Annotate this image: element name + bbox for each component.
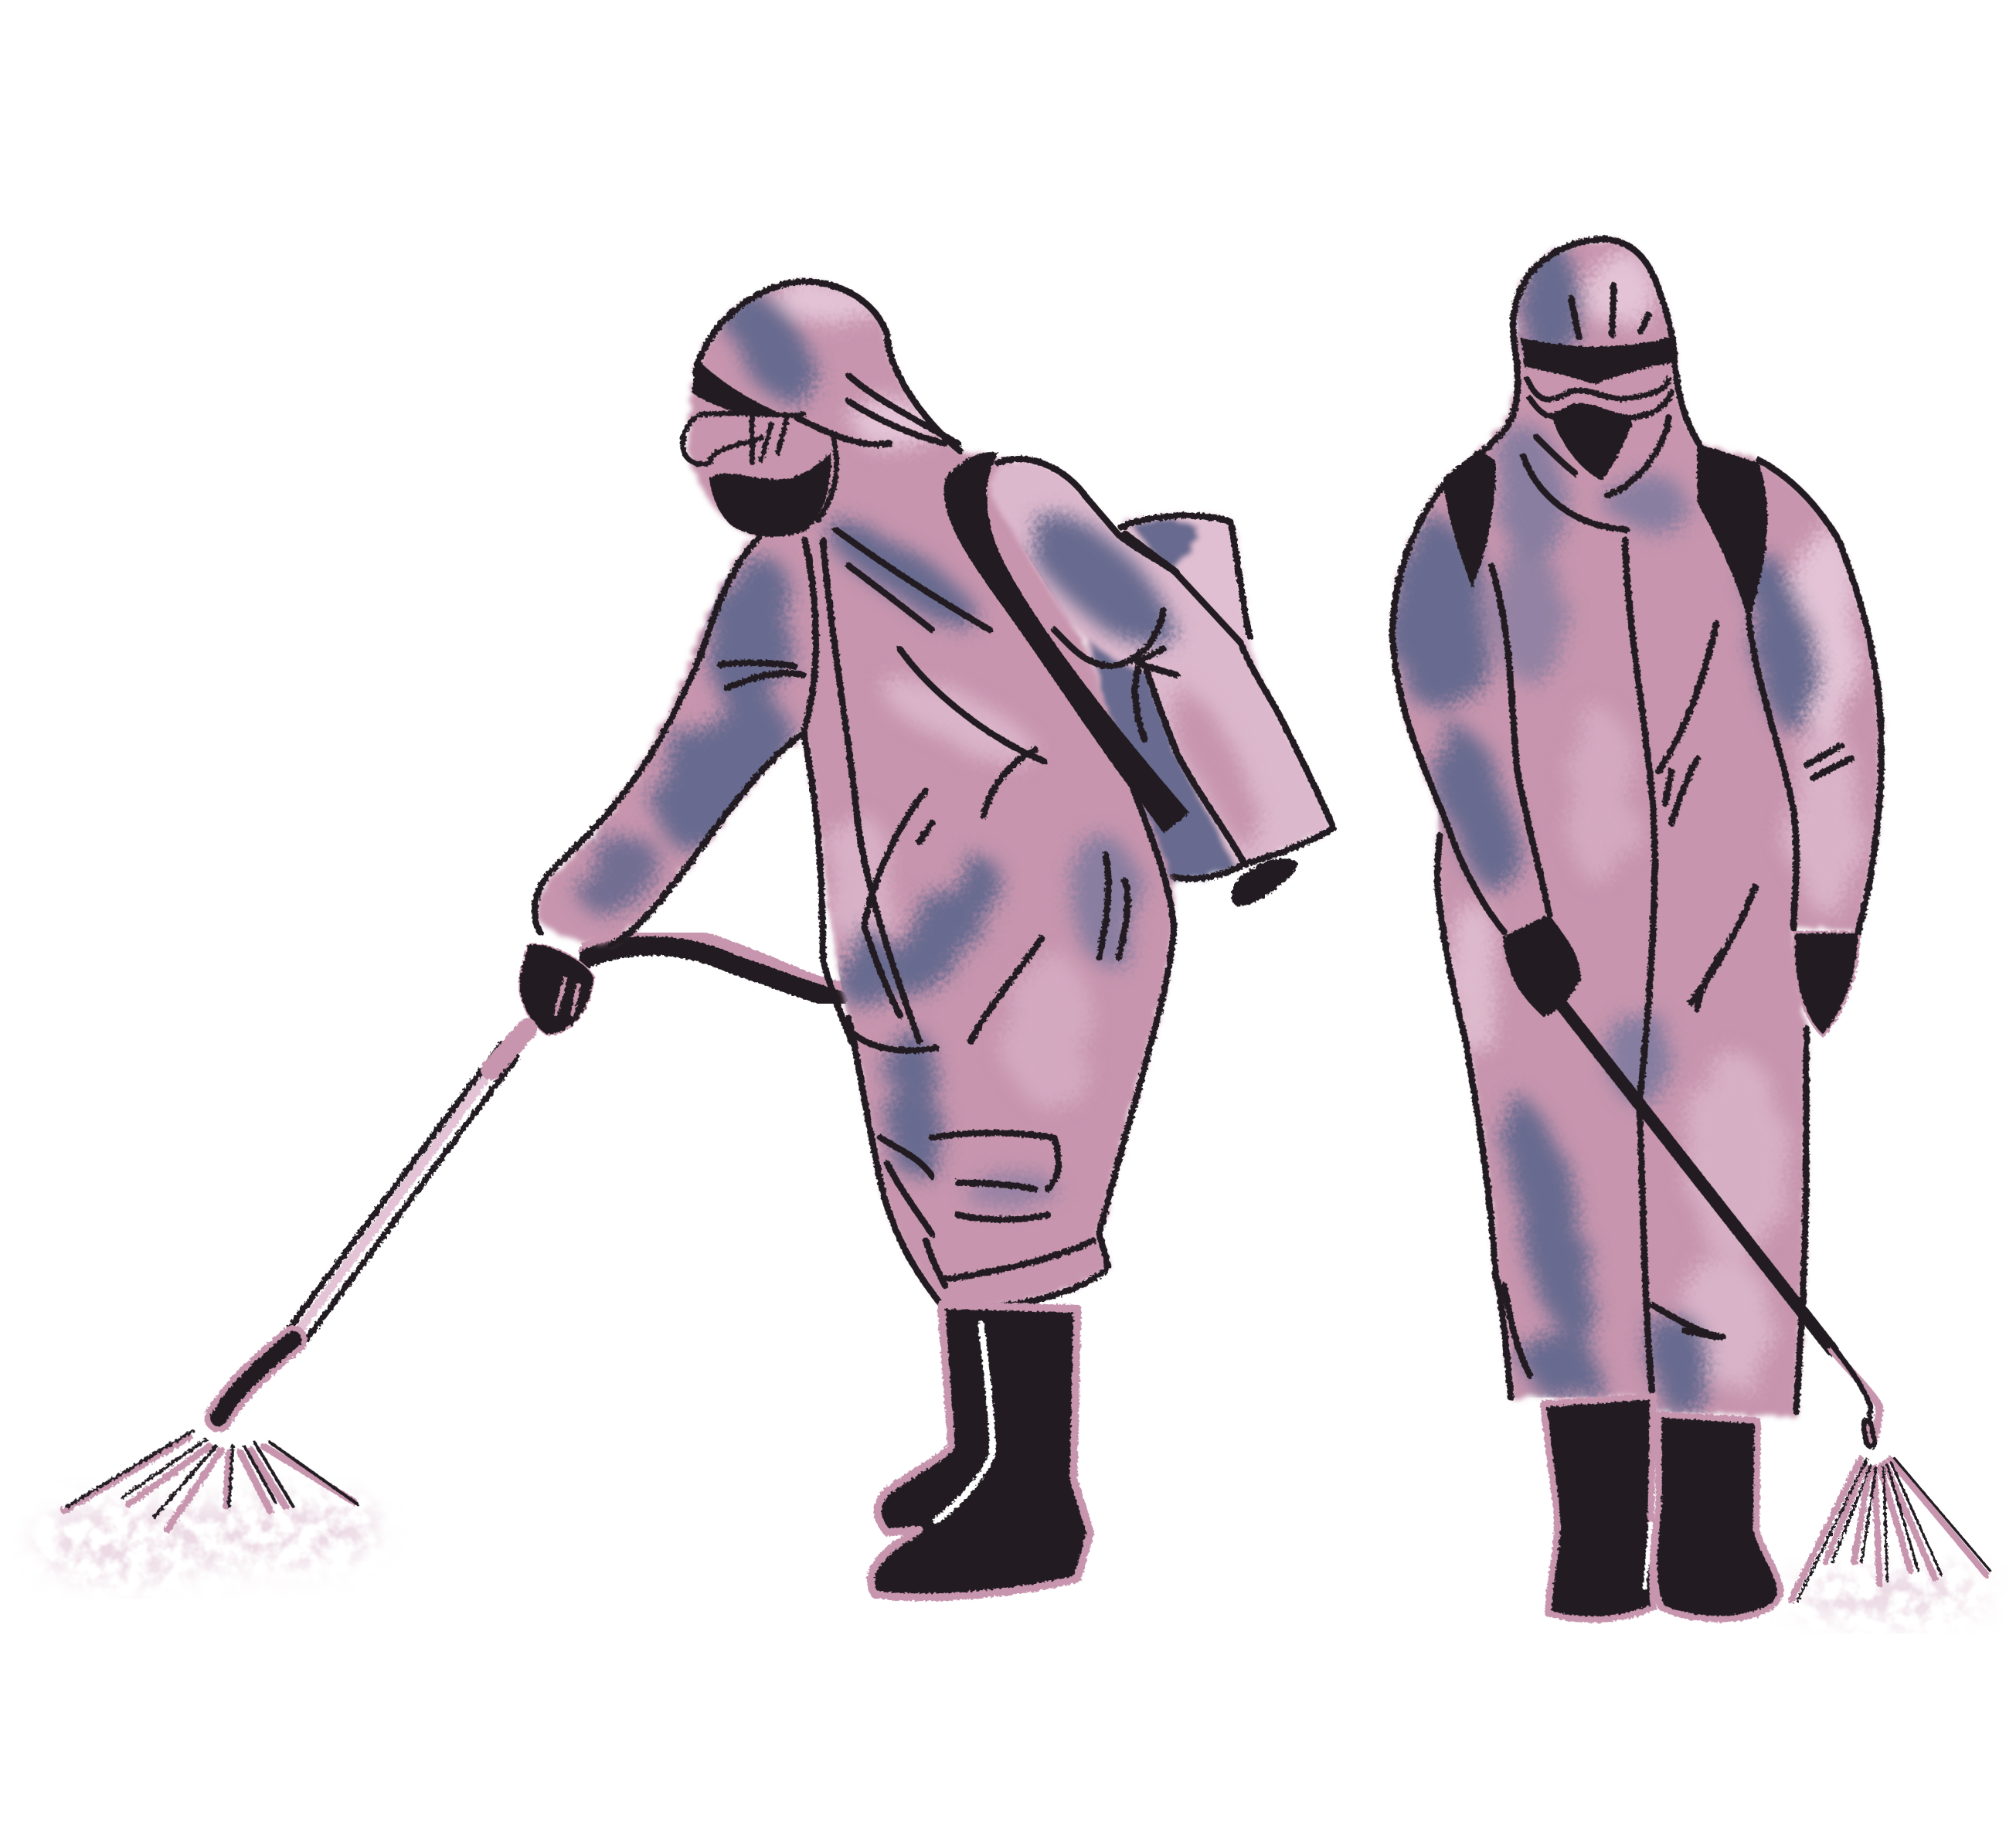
figure: left worker with backpack sprayer <box>64 277 1333 1597</box>
suit line work <box>535 281 1333 1307</box>
illustration: two disinfection workers spraying <box>32 235 1992 1633</box>
spray wand <box>1552 992 1880 1443</box>
backpack straps <box>1443 444 1767 624</box>
suit: torso, legs and reaching arm <box>537 277 1175 1307</box>
spray jets <box>64 1431 358 1530</box>
spray jets <box>1791 1459 1991 1600</box>
boots <box>871 1305 1090 1597</box>
boots <box>1543 1396 1780 1619</box>
spray mist: right <box>1793 1566 1987 1623</box>
hose <box>589 936 838 1000</box>
suit: back arm <box>990 460 1333 864</box>
tank outline <box>1121 515 1249 879</box>
hand: back glove <box>1232 858 1299 906</box>
gloves <box>1501 912 1859 1036</box>
shoulder strap <box>944 452 1189 833</box>
suit: right worker body <box>1391 239 1882 1417</box>
hand: left glove <box>519 943 594 1035</box>
spray mist: left <box>39 1494 379 1582</box>
figure: right worker <box>1391 239 1991 1619</box>
spray wand <box>219 1028 527 1418</box>
backpack tank <box>1073 515 1299 881</box>
goggles and mask <box>1521 335 1675 481</box>
goggles and face <box>682 358 837 537</box>
suit line work <box>1392 239 1882 1412</box>
